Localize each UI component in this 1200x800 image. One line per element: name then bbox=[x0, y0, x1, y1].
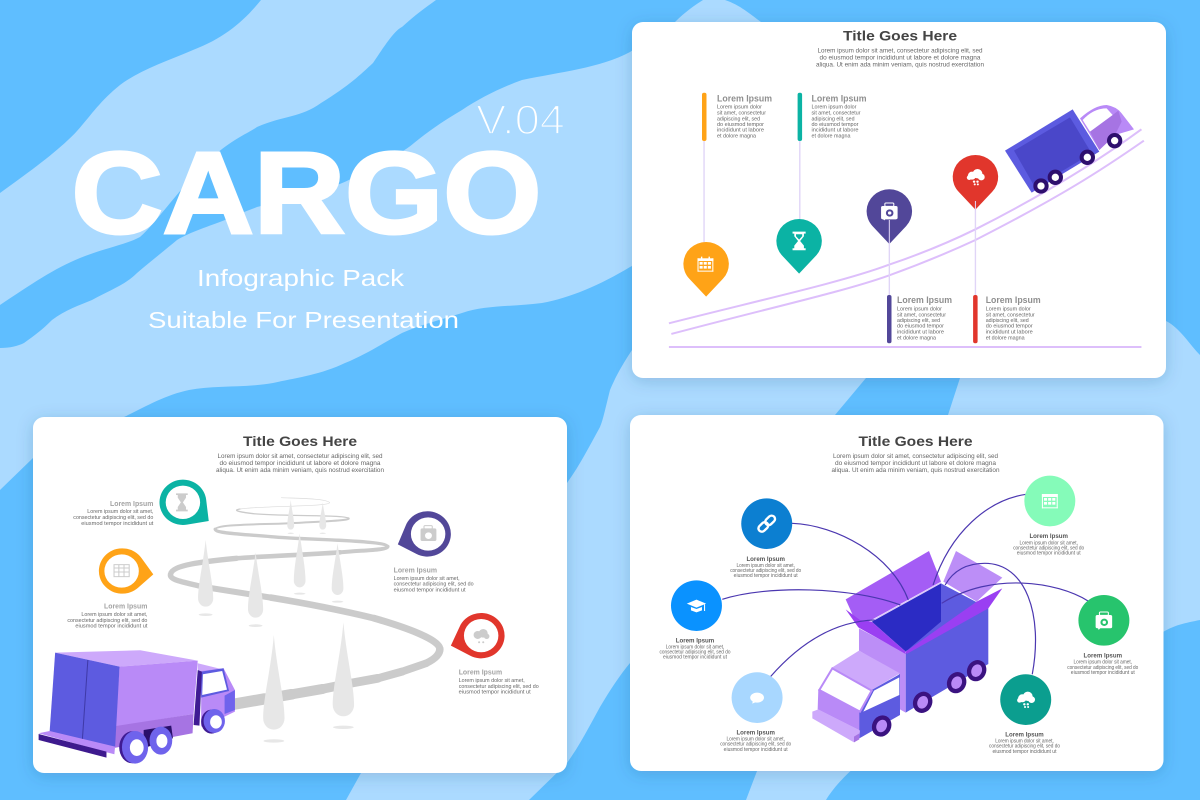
callout: orange: sit amet, consectetur bbox=[717, 110, 766, 116]
callout: teal: Lorem Ipsum bbox=[812, 94, 866, 104]
callout: teal: sit amet, consectetur bbox=[812, 110, 861, 116]
label: chat: eiusmod tempor incididunt ut bbox=[724, 747, 788, 753]
callout: red: Lorem Ipsum bbox=[986, 295, 1041, 305]
label: calendar: eiusmod tempor incididunt ut bbox=[1017, 550, 1081, 556]
callout: teal: Lorem ipsum dolor bbox=[812, 105, 857, 111]
label: cloud: consectetur adipiscing elit, sed do bbox=[989, 744, 1060, 750]
ring pin: camera bbox=[398, 511, 451, 557]
panel: uphill road timeline bbox=[632, 22, 1166, 378]
label: camera: consectetur adipiscing elit, sed do bbox=[1067, 665, 1139, 671]
label: red: Lorem Ipsum bbox=[459, 668, 502, 676]
intro text bbox=[832, 453, 1000, 474]
label: cloud: Lorem ipsum dolor sit amet, bbox=[995, 739, 1054, 745]
callout: teal: et dolore magna bbox=[812, 133, 851, 139]
node: link bbox=[741, 498, 792, 549]
callout: teal: adipiscing elit, sed bbox=[812, 116, 854, 122]
callout: indigo: sit amet, consectetur bbox=[897, 312, 946, 318]
label: teal bbox=[73, 499, 154, 527]
label: calendar: Lorem Ipsum bbox=[1029, 533, 1068, 540]
callout: indigo: incididunt ut labore bbox=[897, 329, 944, 335]
label: graduation bbox=[660, 637, 731, 660]
label: indigo: Lorem Ipsum bbox=[394, 566, 437, 574]
callout: red: incididunt ut labore bbox=[986, 329, 1033, 335]
intro text: Lorem ipsum dolor sit amet, consectetur adipiscing elit, sed bbox=[818, 48, 983, 55]
label: chat: Lorem ipsum dolor sit amet, bbox=[726, 737, 785, 743]
label: red bbox=[459, 668, 539, 696]
label: chat bbox=[720, 730, 791, 753]
callout: indigo: et dolore magna bbox=[897, 336, 937, 342]
label: chat: Lorem Ipsum bbox=[736, 730, 775, 737]
panel: open cargo truck bbox=[630, 415, 1164, 771]
label: graduation: Lorem ipsum dolor sit amet, bbox=[666, 644, 724, 650]
callout: orange: et dolore magna bbox=[717, 133, 757, 139]
label: red: consectetur adipiscing elit, sed do bbox=[459, 684, 539, 690]
intro text: do eiusmod tempor incididunt ut labore et dolore magna bbox=[220, 460, 381, 467]
callout: red: sit amet, consectetur bbox=[986, 312, 1035, 318]
node: chat bbox=[732, 672, 783, 723]
intro text: aliqua. Ut enim ada minim veniam, quis nostrud exercitation bbox=[816, 62, 985, 69]
ring pin: hourglass bbox=[159, 480, 209, 525]
label: chat: consectetur adipiscing elit, sed do bbox=[720, 742, 791, 748]
label: orange: consectetur adipiscing elit, sed do bbox=[67, 618, 147, 624]
road-side trees bbox=[198, 500, 354, 743]
label: teal: consectetur adipiscing elit, sed do bbox=[73, 515, 153, 521]
callout: indigo bbox=[887, 295, 952, 343]
intro text bbox=[816, 48, 985, 69]
label: cloud: eiusmod tempor incididunt ut bbox=[992, 749, 1057, 755]
intro text: Lorem ipsum dolor sit amet, consectetur adipiscing elit, sed bbox=[833, 453, 999, 460]
callout: orange: Lorem Ipsum bbox=[717, 94, 772, 104]
node: graduation cap bbox=[671, 580, 722, 631]
label: orange: eiusmod tempor incididunt ut bbox=[75, 624, 148, 630]
label: graduation: eiusmod tempor incididunt ut bbox=[663, 654, 728, 660]
label: camera: eiusmod tempor incididunt ut bbox=[1071, 670, 1135, 676]
callout: red: adipiscing elit, sed bbox=[986, 318, 1029, 324]
label: orange bbox=[67, 602, 148, 630]
callout: orange: Lorem ipsum dolor bbox=[717, 105, 762, 111]
label: link: Lorem ipsum dolor sit amet, bbox=[736, 563, 795, 569]
callout: red: do eiusmod tempor bbox=[986, 324, 1033, 330]
truck climbing the road bbox=[1005, 105, 1134, 193]
heading: Title Goes Here bbox=[843, 28, 957, 44]
callout: red bbox=[973, 295, 1041, 343]
pin: camera bbox=[867, 189, 912, 244]
label: indigo: Lorem ipsum dolor sit amet, bbox=[394, 576, 460, 582]
label: camera: Lorem ipsum dolor sit amet, bbox=[1074, 660, 1132, 666]
connector lines bbox=[704, 141, 800, 243]
node: cloud bbox=[1000, 674, 1051, 725]
label: graduation: Lorem Ipsum bbox=[676, 637, 714, 644]
panel: winding road bbox=[33, 417, 567, 773]
pin: hourglass bbox=[776, 219, 822, 274]
callout: teal: do eiusmod tempor bbox=[812, 122, 859, 128]
node: camera bbox=[1078, 595, 1129, 646]
label: orange: Lorem Ipsum bbox=[104, 602, 148, 610]
callout: orange: incididunt ut labore bbox=[717, 128, 764, 134]
ring pin: calendar bbox=[99, 548, 153, 594]
callout: red: Lorem ipsum dolor bbox=[986, 307, 1031, 313]
subtitle: infographic pack: Infographic Pack bbox=[197, 265, 405, 291]
subtitle: suitable for presentation: Suitable For Presentation bbox=[148, 307, 459, 333]
main title: CARGO: CARGO bbox=[72, 128, 542, 258]
label: cloud: Lorem Ipsum bbox=[1005, 732, 1044, 739]
intro text: do eiusmod tempor incididunt ut labore et dolore magna bbox=[820, 55, 981, 62]
label: link: eiusmod tempor incididunt ut bbox=[734, 573, 798, 579]
intro text: aliqua. Ut enim ada minim veniam, quis nostrud exercitation bbox=[216, 467, 385, 474]
callout: indigo: Lorem Ipsum bbox=[897, 295, 952, 305]
label: teal: Lorem ipsum dolor sit amet, bbox=[87, 509, 154, 515]
label: indigo: eiusmod tempor incididunt ut bbox=[394, 587, 466, 593]
callout: orange: do eiusmod tempor bbox=[717, 122, 764, 128]
label: indigo: consectetur adipiscing elit, sed do bbox=[394, 582, 474, 588]
label: camera bbox=[1067, 653, 1139, 676]
label: cloud bbox=[989, 732, 1060, 755]
callout: teal: incididunt ut labore bbox=[812, 128, 858, 134]
label: link bbox=[730, 556, 801, 579]
callout: indigo: adipiscing elit, sed bbox=[897, 318, 940, 324]
callout: orange: adipiscing elit, sed bbox=[717, 116, 760, 122]
node: calendar bbox=[1024, 476, 1075, 526]
callout: red: et dolore magna bbox=[986, 336, 1026, 342]
intro text bbox=[216, 453, 385, 474]
intro text: Lorem ipsum dolor sit amet, consectetur adipiscing elit, sed bbox=[218, 453, 383, 460]
callout: indigo: do eiusmod tempor bbox=[897, 324, 944, 330]
heading: Title Goes Here bbox=[858, 433, 973, 449]
label: teal: Lorem Ipsum bbox=[110, 499, 154, 508]
label: link: consectetur adipiscing elit, sed do bbox=[730, 568, 801, 574]
label: graduation: consectetur adipiscing elit, sed do bbox=[660, 649, 731, 655]
intro text: do eiusmod tempor incididunt ut labore et dolore magna bbox=[835, 460, 997, 467]
label: calendar: consectetur adipiscing elit, sed do bbox=[1013, 545, 1084, 551]
heading: Title Goes Here bbox=[243, 433, 357, 449]
intro text: aliqua. Ut enim ada minim veniam, quis nostrud exercitation bbox=[832, 467, 1000, 474]
label: teal: eiusmod tempor incididunt ut bbox=[81, 521, 154, 527]
isometric open truck bbox=[812, 551, 1002, 742]
pin: calendar bbox=[683, 242, 729, 297]
road lines bbox=[669, 129, 1144, 347]
label: calendar bbox=[1013, 533, 1084, 556]
pin: weather cloud bbox=[953, 155, 998, 210]
label: camera: Lorem Ipsum bbox=[1084, 653, 1122, 660]
label: orange: Lorem ipsum dolor sit amet, bbox=[81, 612, 148, 618]
truck rear view bbox=[39, 650, 235, 764]
label: red: Lorem ipsum dolor sit amet, bbox=[459, 678, 525, 684]
label: calendar: Lorem ipsum dolor sit amet, bbox=[1019, 540, 1078, 546]
label: red: eiusmod tempor incididunt ut bbox=[459, 690, 531, 696]
callout: teal bbox=[798, 93, 866, 141]
ring pin: cloud bbox=[451, 613, 505, 658]
callout: orange bbox=[702, 93, 772, 141]
label: indigo bbox=[394, 566, 474, 593]
label: link: Lorem Ipsum bbox=[746, 556, 785, 563]
callout: indigo: Lorem ipsum dolor bbox=[897, 307, 942, 313]
winding road bbox=[170, 498, 440, 704]
connector lines below pins bbox=[889, 209, 975, 295]
connector curves bbox=[722, 494, 1088, 677]
version label: V.04 bbox=[476, 96, 565, 143]
